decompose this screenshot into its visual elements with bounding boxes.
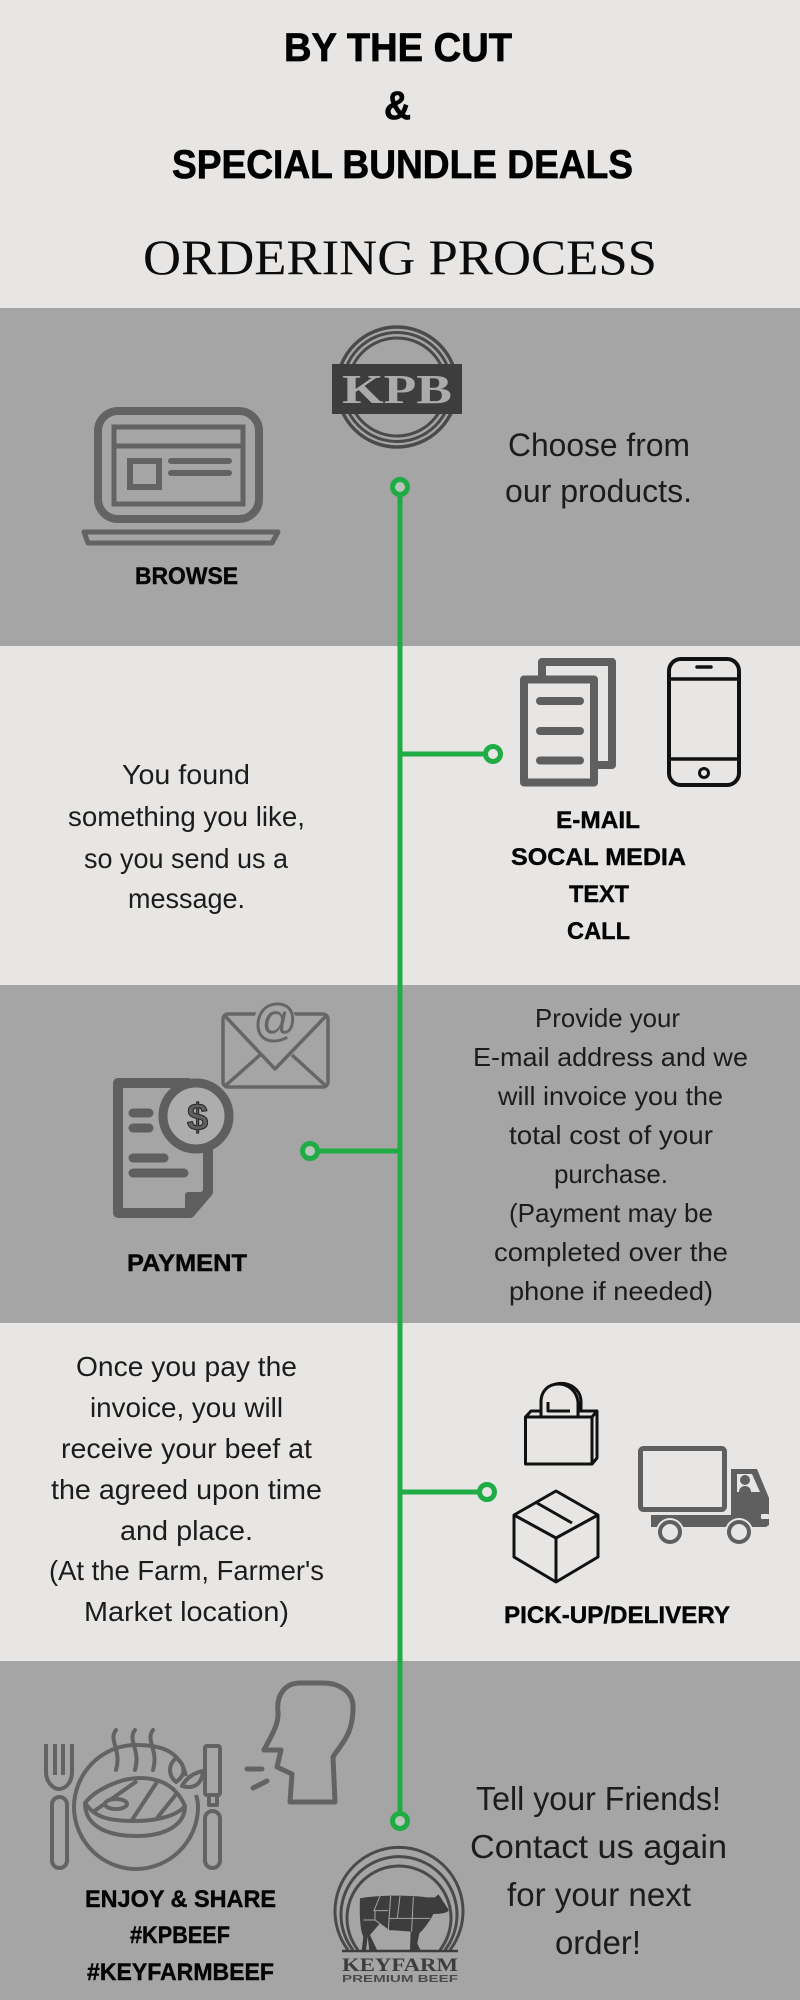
panel: payment (0, 985, 800, 1323)
label: payment: PAYMENT (127, 1250, 247, 1277)
icon: cow cuts (360, 1894, 449, 1951)
subtitle: ORDERING PROCESS (143, 229, 657, 285)
text: receive your beef: receive your beef at (61, 1433, 312, 1464)
icon: envelope: @ (253, 994, 298, 1046)
logo: KPB: KPB (342, 366, 452, 412)
text: receive your beef: invoice, you will (90, 1392, 283, 1423)
label: enjoy and share: #KPBEEF (130, 1922, 230, 1949)
label: contact methods (511, 807, 686, 945)
label: browse: BROWSE (135, 563, 238, 590)
timeline: green line with nodes (302, 480, 500, 1828)
label: contact methods: SOCAL MEDIA (511, 844, 686, 871)
title (172, 26, 633, 187)
text: choose from our products: Choose from (508, 427, 690, 463)
icon: phone (669, 659, 739, 785)
logo: KPB (332, 327, 462, 447)
panel: browse (0, 308, 800, 646)
text: receive your beef: Once you pay the (76, 1351, 297, 1382)
label: pick-up/delivery: PICK-UP/DELIVERY (504, 1602, 730, 1629)
text: invoice details: E-mail address and we (473, 1042, 748, 1072)
text: tell your friends: order! (555, 1924, 641, 1961)
text: you found something (68, 759, 305, 914)
icon: invoice: $ (187, 1097, 208, 1139)
icon: documents (524, 662, 612, 782)
text: receive your beef: the agreed upon time (51, 1474, 322, 1505)
text: invoice details: Provide your (535, 1003, 680, 1033)
text: you found something: message. (128, 883, 245, 914)
text: tell your friends: for your next (507, 1876, 691, 1913)
text: tell your friends: Tell your Friends! (476, 1780, 721, 1817)
text: choose from our products (505, 427, 692, 509)
label: contact methods: TEXT (569, 881, 629, 908)
icon: box (514, 1491, 598, 1582)
icon: plate with steak (46, 1730, 220, 1869)
text: you found something: something you like, (68, 801, 305, 832)
text: invoice details: will invoice you the (497, 1081, 723, 1111)
label: contact methods: CALL (567, 918, 630, 945)
text: invoice details: completed over the (494, 1237, 728, 1267)
text: invoice details: purchase. (554, 1159, 668, 1189)
text: tell your friends (470, 1780, 727, 1961)
label: enjoy and share (85, 1886, 276, 1986)
text: you found something: so you send us a (84, 843, 288, 874)
icon: invoice (118, 1083, 229, 1213)
label: enjoy and share: ENJOY & SHARE (85, 1886, 276, 1913)
text: you found something: You found (122, 759, 250, 790)
text: invoice details (473, 1003, 748, 1306)
icon: delivery truck (640, 1448, 769, 1546)
panel: enjoy and share (0, 1661, 800, 2000)
title: & (384, 84, 411, 128)
logo: Keyfarm Premium Beef: KEYFARM (342, 1955, 458, 1976)
text: invoice details: phone if needed) (509, 1276, 713, 1306)
title: SPECIAL BUNDLE DEALS (172, 143, 633, 187)
text: tell your friends: Contact us again (470, 1828, 727, 1865)
logo: Keyfarm Premium Beef (335, 1847, 463, 1985)
text: receive your beef: (At the Farm, Farmer's (49, 1555, 324, 1586)
icon: shopping bag (526, 1383, 597, 1464)
label: enjoy and share: #KEYFARMBEEF (87, 1959, 274, 1986)
icon: speaking head (247, 1683, 353, 1802)
label: contact methods: E-MAIL (556, 807, 640, 834)
panel: header (0, 0, 800, 308)
title: BY THE CUT (284, 26, 512, 70)
icon: envelope (223, 994, 328, 1087)
panel: pick-up and delivery (0, 1323, 800, 1661)
icon: laptop (84, 411, 278, 543)
panel: contact (0, 646, 800, 985)
text: receive your beef: Market location) (84, 1596, 289, 1627)
text: receive your beef: and place. (120, 1515, 253, 1546)
text: invoice details: total cost of your (509, 1120, 713, 1150)
text: invoice details: (Payment may be (509, 1198, 713, 1228)
logo: Keyfarm Premium Beef: PREMIUM BEEF (342, 1973, 459, 1985)
text: choose from our products: our products. (505, 473, 692, 509)
text: receive your beef (49, 1351, 324, 1627)
